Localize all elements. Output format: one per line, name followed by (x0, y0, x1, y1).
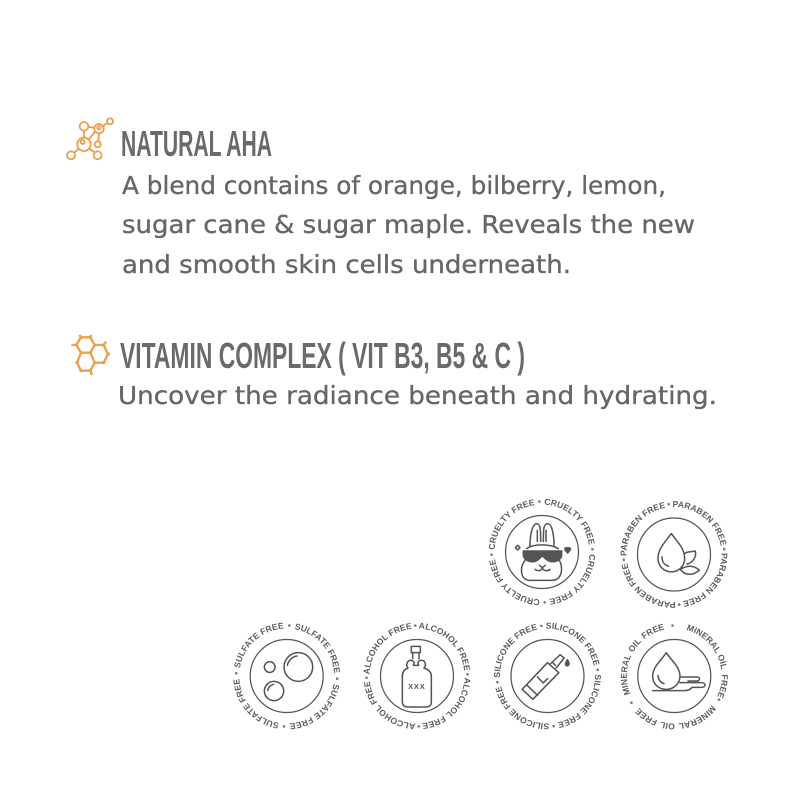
text block: natural aha description: sugar cane & sugar maple. Reveals the new (122, 210, 695, 239)
badge: cruelty free: CRUELTY FREE (549, 554, 596, 605)
badge: sulfate free: SULFATE FREE (290, 684, 339, 730)
icon: bunny with sunglasses (515, 524, 570, 580)
badge: alcohol free: ALCOHOL FREE (422, 678, 470, 729)
badge: silicone free (494, 622, 601, 730)
text block: natural aha description: A blend contains of orange, bilberry, lemon, (122, 171, 666, 200)
badge: sulfate free (233, 622, 340, 730)
badge: sulfate free: SULFATE FREE (233, 679, 278, 728)
badge: paraben free (620, 501, 728, 608)
icon: drop with leaves (658, 534, 699, 574)
badge: paraben free: PARABEN FREE (673, 501, 726, 546)
badge: sulfate free: SULFATE FREE (295, 624, 340, 673)
icon: silicone tube (522, 655, 569, 699)
heading: natural aha: NATURAL AHA (121, 123, 272, 164)
icon: vitamin hexagons (71, 335, 110, 375)
badge: cruelty free: CRUELTY FREE (488, 499, 535, 550)
text block: vitamin complex description: Uncover the radiance beneath and hydrating. (118, 381, 717, 410)
badge: alcohol free: ALCOHOL FREE (364, 623, 412, 674)
badge: alcohol free: ALCOHOL FREE (364, 681, 416, 730)
badge: silicone free: SILICONE FREE (558, 674, 601, 728)
text block: natural aha description: and smooth skin cells underneath. (122, 250, 571, 279)
badge: cruelty free: CRUELTY FREE (544, 498, 595, 545)
badge: paraben free: PARABEN FREE (622, 563, 675, 608)
badge: mineral oil free: FREE (717, 675, 728, 698)
badge: mineral oil free: MINERAL OIL (686, 624, 726, 670)
text block: natural aha description (122, 171, 695, 279)
badge: mineral oil free (620, 624, 728, 730)
badge: sulfate free: SULFATE FREE (234, 622, 284, 668)
badge: paraben free: PARABEN FREE (682, 554, 728, 607)
badge: mineral oil free: MINERAL OIL FREE (620, 624, 664, 696)
badge: alcohol free (364, 622, 470, 730)
badge: cruelty free (488, 498, 596, 606)
badge: silicone free: SILICONE FREE (546, 622, 600, 666)
icon: bottle: XXX (408, 682, 426, 691)
badge: mineral oil free: MINERAL OIL FREE (635, 706, 716, 730)
icon: oil drop with puddle (653, 653, 705, 691)
badge: alcohol free: ALCOHOL FREE (418, 622, 470, 671)
badge: silicone free: SILICONE FREE (494, 624, 538, 678)
badge: silicone free: SILICONE FREE (496, 686, 549, 730)
icon: bubbles (264, 653, 313, 701)
badge: cruelty free: CRUELTY FREE (489, 559, 540, 606)
heading: vitamin complex: VITAMIN COMPLEX ( VIT B3, B5 & C ) (120, 335, 525, 376)
badge: paraben free: PARABEN FREE (620, 502, 666, 556)
icon: molecule (67, 118, 113, 159)
